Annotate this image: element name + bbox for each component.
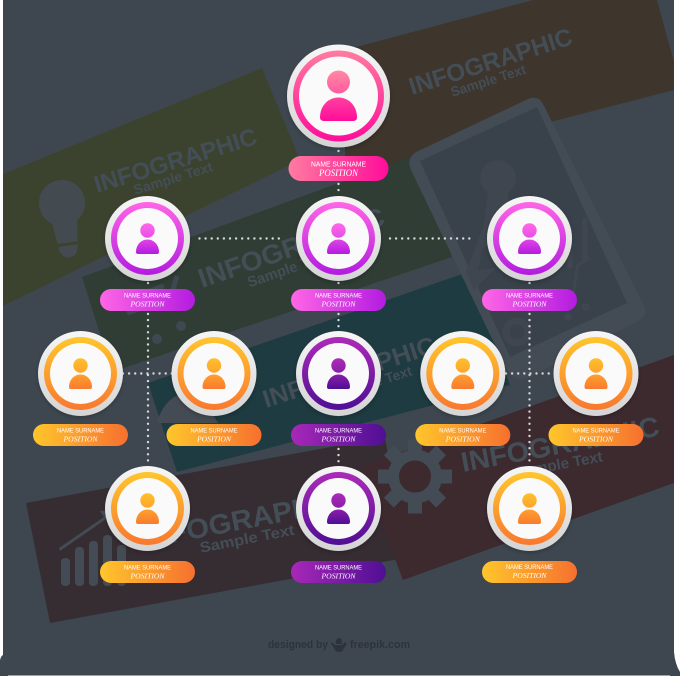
label: row 3 centre bbox=[291, 424, 386, 446]
label: top manager bbox=[288, 156, 388, 181]
icon: person bbox=[327, 358, 350, 389]
icon: shopping cart bbox=[127, 276, 186, 344]
label: row 4 left bbox=[100, 561, 195, 583]
node: row 3 right bbox=[420, 331, 505, 416]
icon: person bbox=[136, 493, 159, 524]
label: row 3 centre: POSITION bbox=[320, 434, 356, 444]
watermark: brown banner text: INFOGRAPHIC bbox=[406, 24, 576, 101]
label: row 3 right: POSITION bbox=[445, 434, 481, 444]
label: row 2 left: POSITION bbox=[129, 300, 165, 308]
banner: olive left bbox=[3, 68, 300, 306]
label: row 4 right: POSITION bbox=[511, 571, 547, 580]
node: row 4 left bbox=[105, 466, 190, 551]
icon: person bbox=[327, 493, 350, 524]
label: row 2 right bbox=[482, 289, 577, 311]
label: row 3 far right bbox=[548, 424, 644, 446]
credit: designed by freepik: freepik.com bbox=[350, 639, 410, 651]
watermark: maroon right text: INFOGRAPHIC bbox=[458, 411, 662, 478]
label: row 4 right bbox=[482, 561, 577, 583]
node: row 3 left bbox=[172, 331, 256, 416]
label: row 3 far left: POSITION bbox=[62, 434, 98, 444]
node: row 3 centre bbox=[296, 331, 381, 416]
banner: maroon right bbox=[360, 355, 674, 580]
label: row 4 centre: NAME SURNAME bbox=[315, 564, 363, 572]
label: row 3 right bbox=[415, 424, 510, 446]
icon: person bbox=[202, 358, 226, 389]
icon: person bbox=[327, 223, 350, 254]
banner: brown top right bbox=[345, 0, 674, 178]
dotted connector lines bbox=[123, 151, 554, 466]
label: row 2 centre bbox=[291, 289, 386, 311]
watermark: maroon left text: Sample Text bbox=[198, 522, 296, 557]
label: top manager: POSITION bbox=[318, 168, 359, 178]
label: row 3 far right: POSITION bbox=[578, 434, 614, 444]
icon: person bbox=[136, 223, 159, 254]
label: row 3 far left: NAME SURNAME bbox=[57, 428, 105, 434]
label: row 3 far left bbox=[33, 424, 128, 446]
node: row 3 far left bbox=[38, 331, 123, 416]
banner: dark green centre bbox=[82, 155, 452, 372]
watermark: olive banner text: Sample Text bbox=[131, 158, 215, 198]
label: row 2 left bbox=[100, 289, 195, 311]
watermark: brown banner text: Sample Text bbox=[449, 61, 528, 100]
label: row 3 centre: NAME SURNAME bbox=[315, 428, 363, 434]
label: row 2 left: NAME SURNAME bbox=[124, 292, 172, 300]
label: top manager: NAME SURNAME bbox=[311, 160, 366, 168]
label: row 4 centre bbox=[291, 561, 386, 583]
icon: person bbox=[518, 493, 541, 524]
node: row 2 left bbox=[105, 196, 190, 281]
label: row 3 left: NAME SURNAME bbox=[190, 428, 238, 434]
label: row 2 centre: NAME SURNAME bbox=[315, 292, 363, 300]
label: row 2 right: NAME SURNAME bbox=[506, 292, 554, 300]
node: row 2 right bbox=[487, 196, 572, 281]
watermark: maroon right text: Sample Text bbox=[514, 448, 604, 481]
watermark: maroon left text: INFOGRAPHIC bbox=[137, 485, 344, 555]
icon: light bulb bbox=[36, 177, 92, 261]
icon: person bbox=[320, 70, 357, 121]
banner: teal centre bbox=[148, 272, 510, 472]
label: row 4 left: NAME SURNAME bbox=[124, 564, 172, 572]
icon: freepik logo bbox=[331, 638, 347, 652]
icon: person bbox=[584, 358, 608, 389]
icon: person bbox=[451, 358, 474, 389]
watermark: green banner text: Sample Text bbox=[245, 248, 331, 291]
label: row 3 far right: NAME SURNAME bbox=[572, 428, 620, 434]
icon: person bbox=[518, 223, 541, 254]
node: row 3 far right bbox=[554, 331, 638, 416]
label: row 3 right: NAME SURNAME bbox=[439, 428, 487, 434]
credit: designed by freepik bbox=[268, 638, 410, 652]
icon: rising bar chart bbox=[59, 510, 126, 586]
label: row 2 right: POSITION bbox=[511, 300, 547, 308]
label: row 2 centre: POSITION bbox=[320, 300, 356, 308]
node: row 4 right bbox=[487, 466, 572, 551]
label: row 4 left: POSITION bbox=[129, 572, 165, 580]
banner: maroon left bbox=[26, 437, 405, 623]
label: row 3 left: POSITION bbox=[196, 434, 232, 444]
icon: person bbox=[69, 358, 92, 389]
watermark: teal banner text: INFOGRAPHIC bbox=[259, 331, 439, 414]
label: row 4 right: NAME SURNAME bbox=[506, 564, 554, 571]
credit: designed by freepik: designed by bbox=[268, 639, 329, 651]
watermark: teal banner text: Sample Text bbox=[333, 362, 414, 403]
label: row 4 centre: POSITION bbox=[320, 572, 356, 580]
icon: gear bbox=[378, 440, 452, 514]
node: row 4 centre bbox=[296, 466, 381, 551]
watermark: olive banner text: INFOGRAPHIC bbox=[91, 124, 260, 199]
node: row 2 centre bbox=[296, 196, 381, 281]
label: row 3 left bbox=[166, 424, 262, 446]
watermark: green banner text: INFOGRAPHIC bbox=[194, 202, 388, 294]
icon: phone outline bbox=[409, 98, 645, 379]
node: top manager bbox=[287, 44, 390, 148]
